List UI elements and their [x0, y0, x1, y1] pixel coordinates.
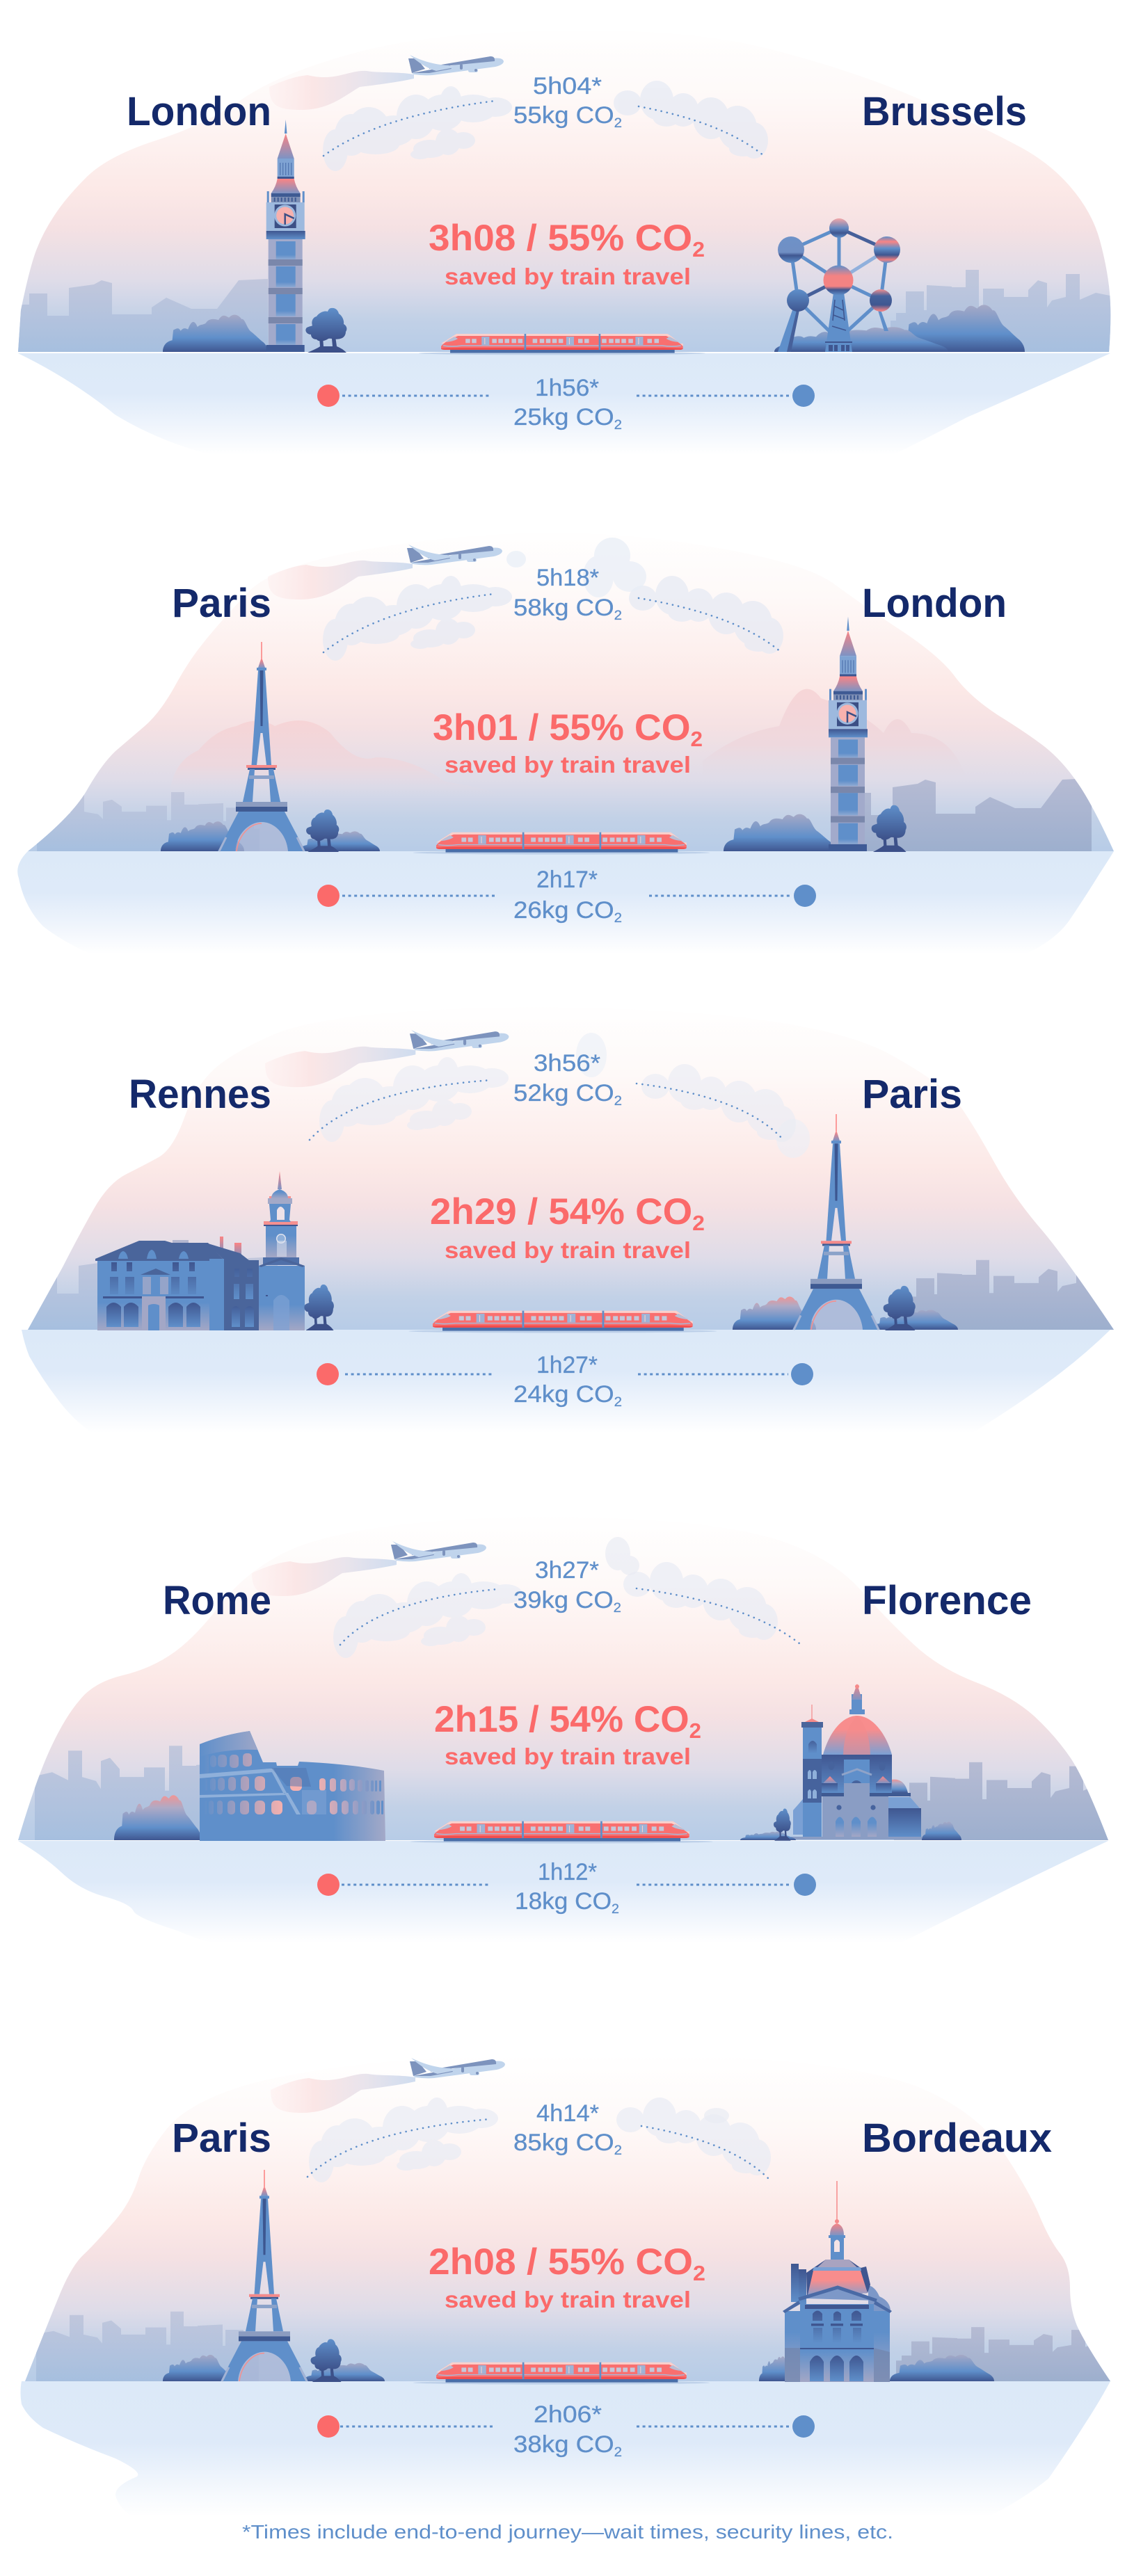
right skyline [865, 779, 1092, 851]
clouds [333, 1537, 778, 1658]
left skyline [37, 792, 259, 851]
flight arc right [639, 106, 764, 156]
right skyline [891, 270, 1113, 352]
train CO2: 26kg CO [513, 897, 607, 924]
saved caption: saved by train travel [445, 1237, 691, 1263]
plane with contrail [268, 545, 502, 599]
heading: destination city: Brussels [862, 89, 1027, 134]
flight CO2: 55kg CO [513, 102, 607, 129]
train [410, 1821, 713, 1844]
train CO2: 2 [614, 2445, 622, 2460]
headline saving: 2 [693, 2261, 705, 2285]
flight CO2: 39kg CO [513, 1587, 607, 1613]
heading: origin city: London [127, 89, 271, 134]
origin dot [317, 1874, 340, 1896]
sky backdrop [25, 2052, 1110, 2381]
landmark: Atomium [778, 218, 900, 352]
plane with contrail [269, 55, 504, 110]
train CO2: 2 [614, 911, 622, 926]
flight CO2: 2 [614, 1601, 621, 1616]
left skyline [35, 1746, 200, 1840]
train [419, 334, 705, 355]
landmark: Eiffel Tower [221, 2170, 308, 2381]
flight CO2: 2 [614, 1094, 622, 1109]
ground backdrop [18, 353, 1110, 456]
train time: 2h06* [534, 2401, 602, 2428]
train route dotted lines [345, 1373, 788, 1376]
left skyline [36, 2312, 259, 2381]
train CO2: 38kg CO [513, 2431, 607, 2458]
train route dotted lines [342, 894, 792, 897]
saved caption: saved by train travel [445, 1744, 691, 1769]
landmark: Colosseum [200, 1731, 385, 1841]
headline saving: 3h01 / 55% CO [433, 707, 687, 748]
headline saving: 2 [692, 1211, 705, 1235]
tree right [872, 805, 907, 852]
tree [311, 2339, 342, 2382]
landmark: Bordeaux town hall [783, 2181, 892, 2382]
clouds [309, 2098, 771, 2182]
right skyline [901, 1260, 1124, 1330]
footnote: *Times include end-to-end journey—wait times, security lines, etc. [242, 2521, 893, 2543]
train route dotted lines [340, 2426, 792, 2427]
train CO2: 24kg CO [513, 1381, 607, 1408]
sky backdrop [18, 31, 1110, 352]
destination dot [792, 385, 815, 407]
headline saving: 2 [691, 727, 703, 751]
bushes right [740, 1821, 961, 1840]
heading: destination city: London [862, 581, 1007, 626]
train [408, 1311, 717, 1333]
tree [774, 1809, 791, 1841]
train route dotted lines [342, 1883, 792, 1886]
sky backdrop [18, 1517, 1108, 1840]
origin dot [317, 385, 340, 407]
train CO2: 2 [614, 1395, 622, 1410]
flight time: 4h14* [536, 2100, 599, 2127]
landmark: Florence cathedral [791, 1684, 922, 1840]
train CO2: 18kg CO [515, 1888, 608, 1915]
tree left [306, 810, 339, 852]
origin dot [317, 2415, 340, 2438]
clouds [323, 538, 783, 661]
tree left [304, 1285, 334, 1330]
flight arc right [639, 598, 781, 652]
heading: origin city: Paris [172, 2116, 271, 2161]
landmark: Big Ben [829, 617, 868, 851]
heading: destination city: Paris [862, 1072, 962, 1117]
heading: destination city: Florence [862, 1578, 1032, 1623]
plane with contrail [252, 1541, 486, 1596]
origin dot [317, 885, 340, 907]
train CO2: 2 [614, 418, 622, 433]
destination dot [792, 2415, 815, 2438]
bushes right [759, 2355, 994, 2381]
flight arc left [340, 1589, 497, 1645]
flight CO2: 58kg CO [513, 595, 607, 621]
heading: origin city: Rennes [129, 1072, 271, 1117]
flight arc right [637, 1588, 803, 1646]
headline saving: 2h15 / 54% CO [434, 1699, 688, 1740]
flight CO2: 52kg CO [513, 1080, 607, 1106]
clouds [319, 1033, 810, 1158]
left skyline [18, 279, 268, 352]
landmark: Rennes town hall and church [95, 1171, 305, 1330]
bushes left [163, 2355, 385, 2381]
flight time: 3h56* [534, 1050, 600, 1077]
landmark: Big Ben [266, 120, 305, 352]
ground backdrop [21, 2381, 1110, 2515]
landmark: Eiffel Tower [218, 642, 305, 851]
panel: Rome to Florence [18, 1517, 1117, 1945]
flight CO2: 2 [614, 2143, 622, 2158]
flight arc left [324, 101, 495, 156]
flight time: 5h18* [536, 565, 599, 591]
train route dotted lines [342, 395, 792, 396]
ground backdrop [18, 1841, 1108, 1945]
ground backdrop [17, 851, 1114, 956]
heading: origin city: Rome [163, 1578, 271, 1623]
destination dot [794, 1874, 816, 1896]
right skyline [894, 1762, 1117, 1840]
tree [305, 308, 346, 353]
origin dot [317, 1363, 339, 1385]
bush left [114, 1795, 201, 1840]
bushes right [733, 1296, 958, 1330]
flight arc right [637, 1084, 783, 1140]
sky backdrop [28, 533, 1114, 851]
headline saving: 2h29 / 54% CO [430, 1191, 684, 1232]
sky backdrop [28, 1007, 1114, 1330]
heading: destination city: Bordeaux [862, 2116, 1052, 2161]
panel: Paris to Bordeaux [21, 2052, 1119, 2515]
bushes right [724, 814, 835, 851]
flight arc right [641, 2126, 768, 2178]
destination dot [791, 1363, 813, 1385]
train CO2: 2 [612, 1902, 619, 1917]
tree right [884, 1286, 916, 1330]
train time: 1h12* [538, 1859, 597, 1885]
train [413, 2362, 710, 2385]
panel: London to Brussels [18, 31, 1113, 456]
bushes left [161, 821, 380, 851]
headline saving: 3h08 / 55% CO [429, 218, 682, 259]
flight CO2: 85kg CO [513, 2130, 607, 2156]
panel: Paris to London [17, 533, 1114, 956]
headline saving: 2h08 / 55% CO [429, 2241, 682, 2283]
bushes right [774, 305, 1025, 352]
train time: 1h27* [536, 1352, 598, 1378]
flight arc left [310, 1080, 492, 1140]
right skyline [896, 2327, 1119, 2381]
saved caption: saved by train travel [445, 264, 691, 289]
flight time: 5h04* [533, 73, 602, 99]
train CO2: 25kg CO [513, 404, 607, 430]
headline saving: 2 [692, 237, 705, 261]
plane with contrail [271, 2058, 505, 2113]
flight CO2: 2 [614, 116, 622, 131]
saved caption: saved by train travel [445, 2287, 691, 2312]
panel: Rennes to Paris [22, 1030, 1114, 1417]
flight arc left [308, 2119, 490, 2177]
destination dot [794, 885, 816, 907]
train time: 2h17* [536, 867, 598, 893]
flight CO2: 2 [614, 609, 622, 623]
train [413, 832, 710, 855]
bushes left [163, 315, 268, 352]
plane with contrail [265, 1030, 509, 1087]
landmark: Eiffel Tower [792, 1114, 880, 1330]
flight arc left [324, 594, 494, 652]
left skyline [28, 1257, 278, 1330]
train time: 1h56* [535, 375, 599, 401]
pink clouds [170, 689, 967, 796]
headline saving: 2 [689, 1718, 701, 1743]
flight time: 3h27* [535, 1557, 599, 1584]
clouds [323, 81, 768, 171]
saved caption: saved by train travel [445, 752, 691, 778]
heading: origin city: Paris [172, 581, 271, 626]
ground backdrop [22, 1330, 1110, 1434]
